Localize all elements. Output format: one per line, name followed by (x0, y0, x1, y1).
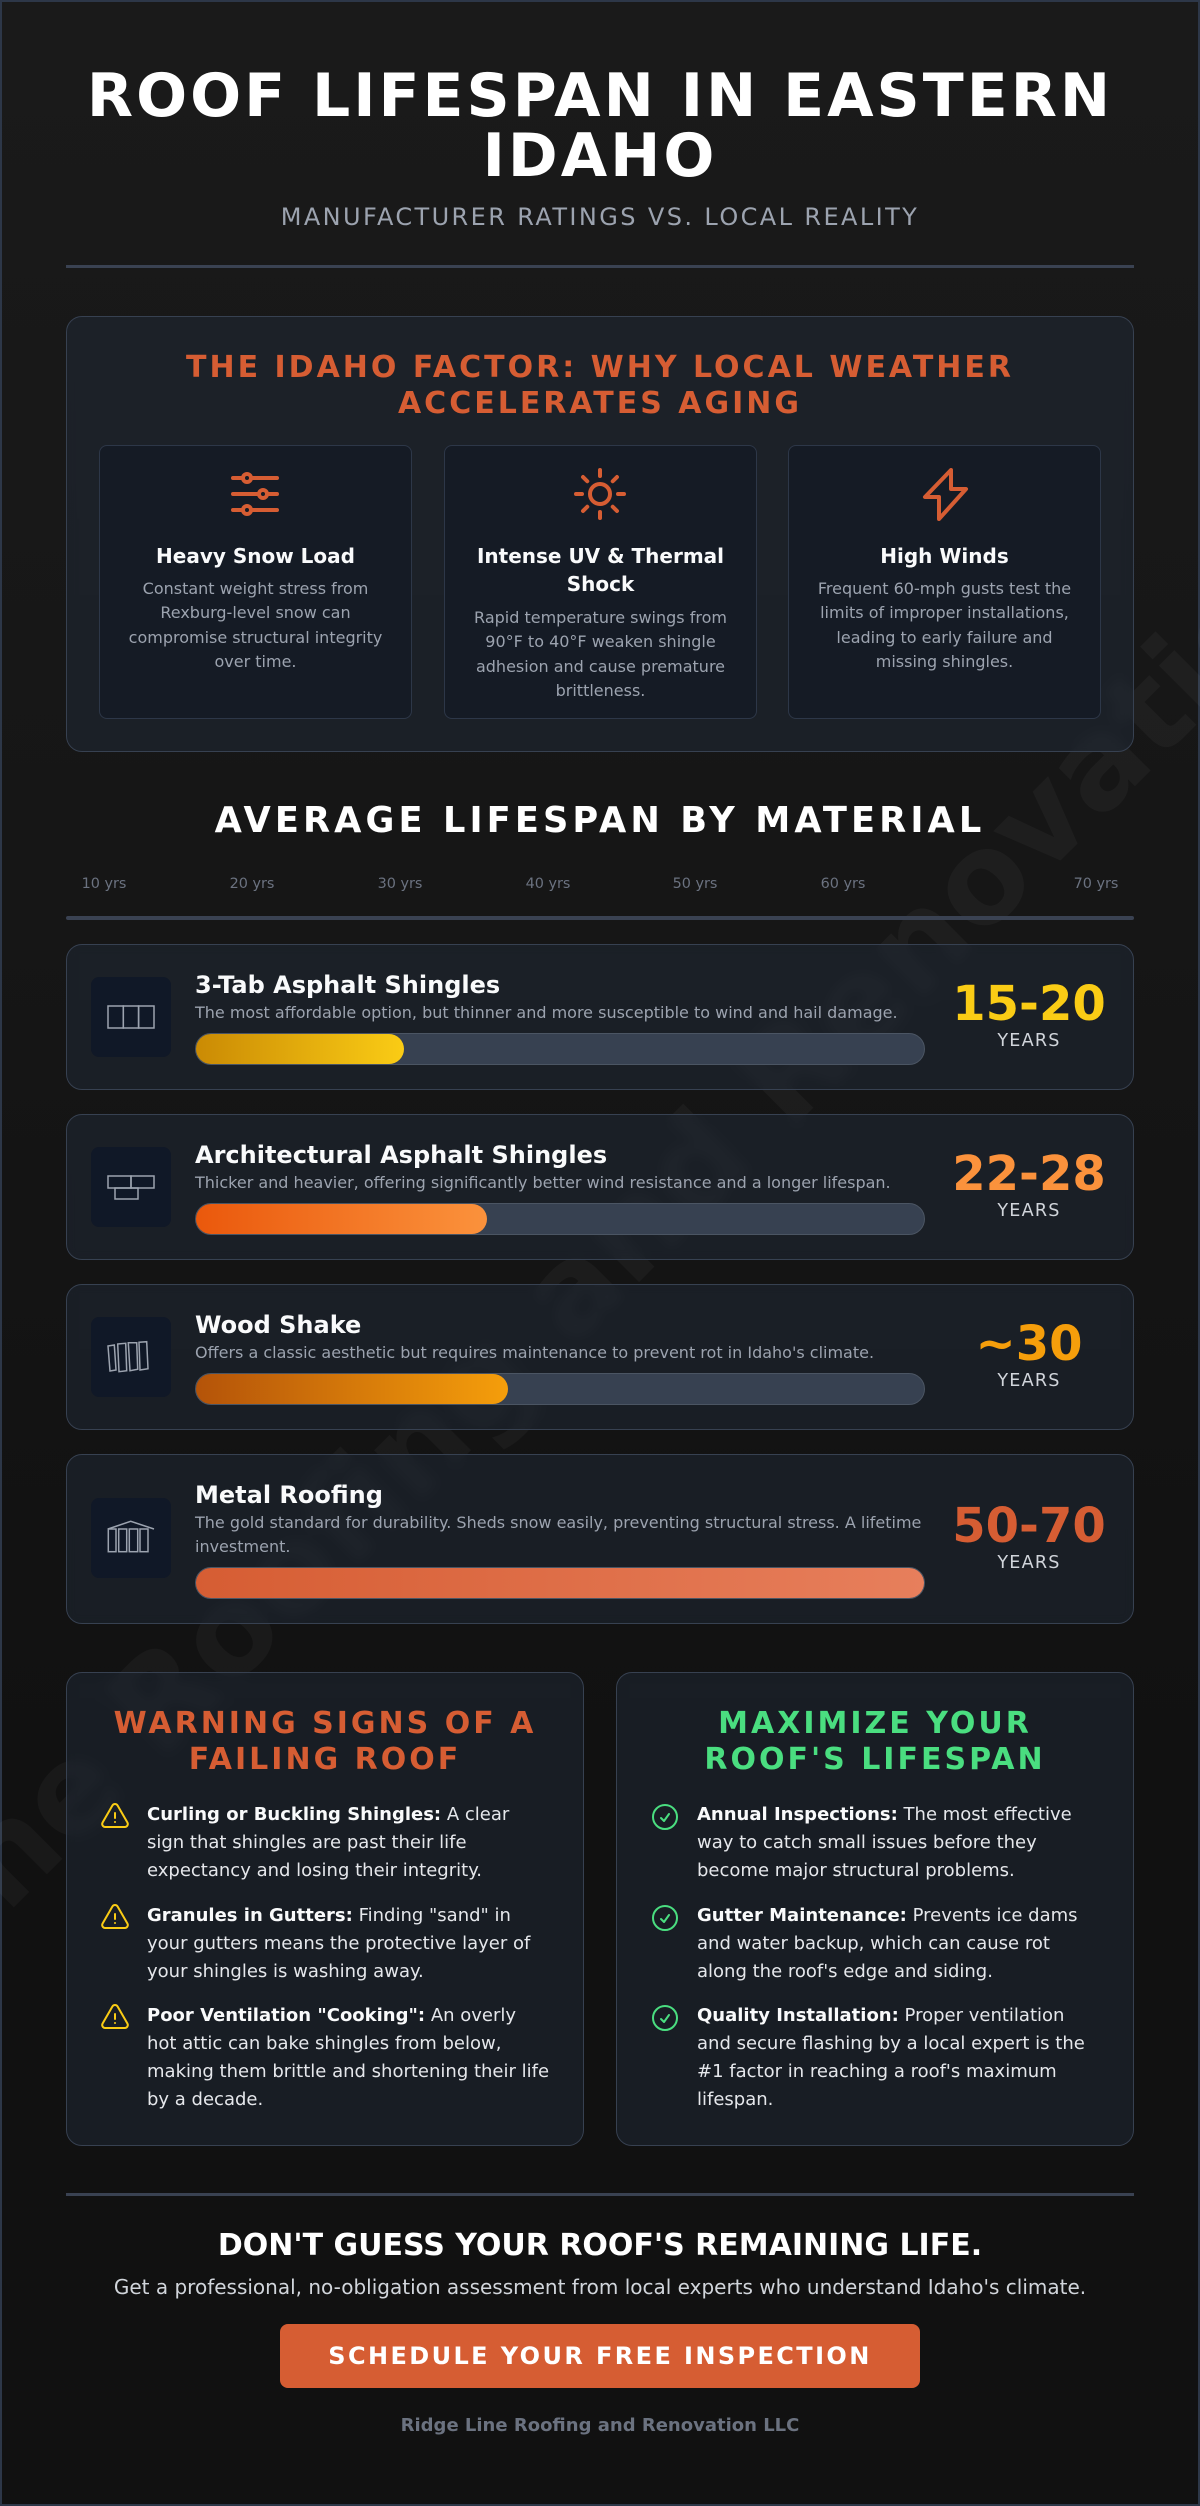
icon: wood shakes (91, 1317, 171, 1397)
warning item: curling (101, 1803, 510, 1881)
card text (129, 579, 382, 671)
call to action heading: DON'T GUESS YOUR ROOF'S REMAINING LIFE. (218, 2228, 982, 2263)
panel: warning signs (66, 1672, 584, 2146)
icon: warning triangle (101, 1803, 129, 1828)
material name: Wood Shake (195, 1310, 361, 1338)
years label: YEARS (997, 1371, 1061, 1391)
warning item: granules (101, 1904, 531, 1982)
timeline axis: 70 yrs (1074, 876, 1118, 892)
icon: bolt (922, 468, 968, 521)
icon: metal roof (91, 1498, 171, 1578)
card text: limits of improper installations, (820, 603, 1069, 622)
material description: Offers a classic aesthetic but requires maintenance to prevent rot in Idaho's climate. (195, 1343, 874, 1362)
panel heading: WARNING SIGNS OF A (114, 1706, 536, 1741)
timeline axis: 10 yrs (82, 876, 126, 892)
item text: Granules in Gutters: Finding "sand" in (147, 1904, 511, 1926)
item text (697, 1804, 1072, 1881)
icon: architectural shingles (91, 1147, 171, 1227)
lifespan bar (195, 1203, 925, 1235)
item text: along the roof's edge and siding. (697, 1961, 993, 1982)
panel: the Idaho factor (66, 316, 1134, 752)
tip item: inspections (652, 1804, 1072, 1881)
card text: compromise structural integrity (129, 628, 382, 647)
timeline axis: 40 yrs (526, 876, 570, 892)
icon: check circle (652, 2005, 678, 2031)
button (280, 2324, 920, 2388)
item text: and secure flashing by a local expert is the (697, 2033, 1085, 2054)
item text (697, 2005, 1085, 2110)
timeline axis (66, 876, 1134, 920)
card heading: Heavy Snow Load (156, 544, 355, 568)
item text: your gutters means the protective layer of (147, 1933, 530, 1954)
panel heading: FAILING ROOF (189, 1742, 461, 1777)
material card: metal (66, 1454, 1134, 1624)
timeline axis: 20 yrs (230, 876, 274, 892)
icon: sun (574, 468, 626, 520)
factor card: wind (788, 445, 1101, 719)
card text (818, 579, 1071, 671)
item text: making them brittle and shortening their life (147, 2061, 549, 2082)
item text: become major structural problems. (697, 1860, 1015, 1881)
tip item: gutters (652, 1904, 1078, 1982)
card text: over time. (214, 652, 296, 671)
icon: warning triangle (101, 1904, 129, 1929)
card text: Frequent 60-mph gusts test the (818, 579, 1071, 598)
panel heading: ROOF'S LIFESPAN (704, 1742, 1046, 1777)
factor card: snow load (99, 445, 412, 719)
card text: missing shingles. (876, 652, 1013, 671)
card text (474, 608, 727, 700)
material name: 3-Tab Asphalt Shingles (195, 970, 500, 998)
card heading: High Winds (880, 544, 1009, 568)
years label: YEARS (997, 1553, 1061, 1573)
panel heading (114, 1706, 536, 1777)
card text: adhesion and cause premature (476, 657, 725, 676)
panel heading (186, 350, 1014, 421)
header divider (66, 265, 1134, 268)
title: IDAHO (483, 121, 717, 191)
call to action text: Get a professional, no-obligation assessment from local experts who understand Idaho's climate. (114, 2275, 1086, 2299)
item text: Gutter Maintenance: Prevents ice dams (697, 1904, 1078, 1926)
item text: by a decade. (147, 2089, 263, 2110)
card text: Constant weight stress from (143, 579, 368, 598)
material name: Metal Roofing (195, 1480, 383, 1508)
icon: sliders (231, 472, 279, 516)
panel heading: MAXIMIZE YOUR (718, 1706, 1032, 1741)
lifespan value: ~30 (975, 1316, 1082, 1372)
item text: Quality Installation: Proper ventilation (697, 2005, 1064, 2026)
card heading: Shock (567, 572, 634, 596)
card text: Rapid temperature swings from (474, 608, 727, 627)
card text: 90°F to 40°F weaken shingle (485, 632, 716, 651)
item text: hot attic can bake shingles from below, (147, 2033, 501, 2054)
item text: #1 factor in reaching a roof's maximum (697, 2061, 1057, 2082)
years label: YEARS (997, 1201, 1061, 1221)
item text: Poor Ventilation "Cooking": An overly (147, 2005, 516, 2026)
card heading (477, 544, 724, 596)
item text: way to catch small issues before they (697, 1832, 1037, 1853)
tip item: installation (652, 2005, 1085, 2110)
item text (147, 1804, 510, 1881)
card text: leading to early failure and (836, 628, 1053, 647)
icon: check circle (652, 1804, 678, 1830)
timeline axis: 60 yrs (821, 876, 865, 892)
title (87, 61, 1113, 191)
factor card: UV (444, 445, 757, 719)
panel: maximize lifespan (616, 1672, 1134, 2146)
item text: expectancy and losing their integrity. (147, 1860, 482, 1881)
lifespan bar (195, 1373, 925, 1405)
material description (194, 1513, 921, 1556)
icon: warning triangle (101, 2004, 129, 2029)
years label: YEARS (997, 1031, 1061, 1051)
item text: Annual Inspections: The most effective (697, 1804, 1072, 1825)
material description: The most affordable option, but thinner and more susceptible to wind and hail damage. (195, 1003, 898, 1022)
item text: your shingles is washing away. (147, 1961, 424, 1982)
item text: Curling or Buckling Shingles: A clear (147, 1804, 509, 1825)
card text: brittleness. (556, 681, 645, 700)
item text: sign that shingles are past their life (147, 1832, 467, 1853)
timeline axis: 30 yrs (378, 876, 422, 892)
panel heading: THE IDAHO FACTOR: WHY LOCAL WEATHER (186, 350, 1014, 385)
lifespan value: 22-28 (952, 1146, 1106, 1202)
button: SCHEDULE YOUR FREE INSPECTION (328, 2342, 872, 2370)
item text (147, 1904, 531, 1982)
lifespan bar (195, 1567, 925, 1599)
warning item: ventilation (101, 2004, 549, 2110)
title: ROOF LIFESPAN IN EASTERN (87, 61, 1113, 131)
material name: Architectural Asphalt Shingles (195, 1140, 607, 1168)
item text: lifespan. (697, 2089, 773, 2110)
timeline axis: 50 yrs (673, 876, 717, 892)
panel heading: ACCELERATES AGING (398, 386, 802, 421)
material card: 3-tab (66, 944, 1134, 1090)
section heading: AVERAGE LIFESPAN BY MATERIAL (215, 800, 985, 841)
item text: and water backup, which can cause rot (697, 1933, 1050, 1954)
material card: wood shake (66, 1284, 1134, 1430)
item text (147, 2005, 549, 2110)
lifespan value: 50-70 (952, 1498, 1106, 1554)
card heading: Intense UV & Thermal (477, 544, 724, 568)
icon: check circle (652, 1905, 678, 1931)
panel heading (704, 1706, 1046, 1777)
icon: 3-tab shingles (91, 977, 171, 1057)
footer divider (66, 2193, 1134, 2196)
material description: Thicker and heavier, offering significantly better wind resistance and a longer lifespan. (195, 1173, 891, 1192)
subtitle: MANUFACTURER RATINGS VS. LOCAL REALITY (281, 203, 919, 231)
company name: Ridge Line Roofing and Renovation LLC (401, 2415, 799, 2436)
lifespan bar (195, 1033, 925, 1065)
material card: architectural (66, 1114, 1134, 1260)
lifespan value: 15-20 (952, 976, 1106, 1032)
material description: The gold standard for durability. Sheds snow easily, preventing structural stress. A lifetime (195, 1513, 921, 1532)
item text (697, 1904, 1078, 1982)
card text: Rexburg-level snow can (160, 603, 351, 622)
material description: investment. (195, 1537, 290, 1556)
